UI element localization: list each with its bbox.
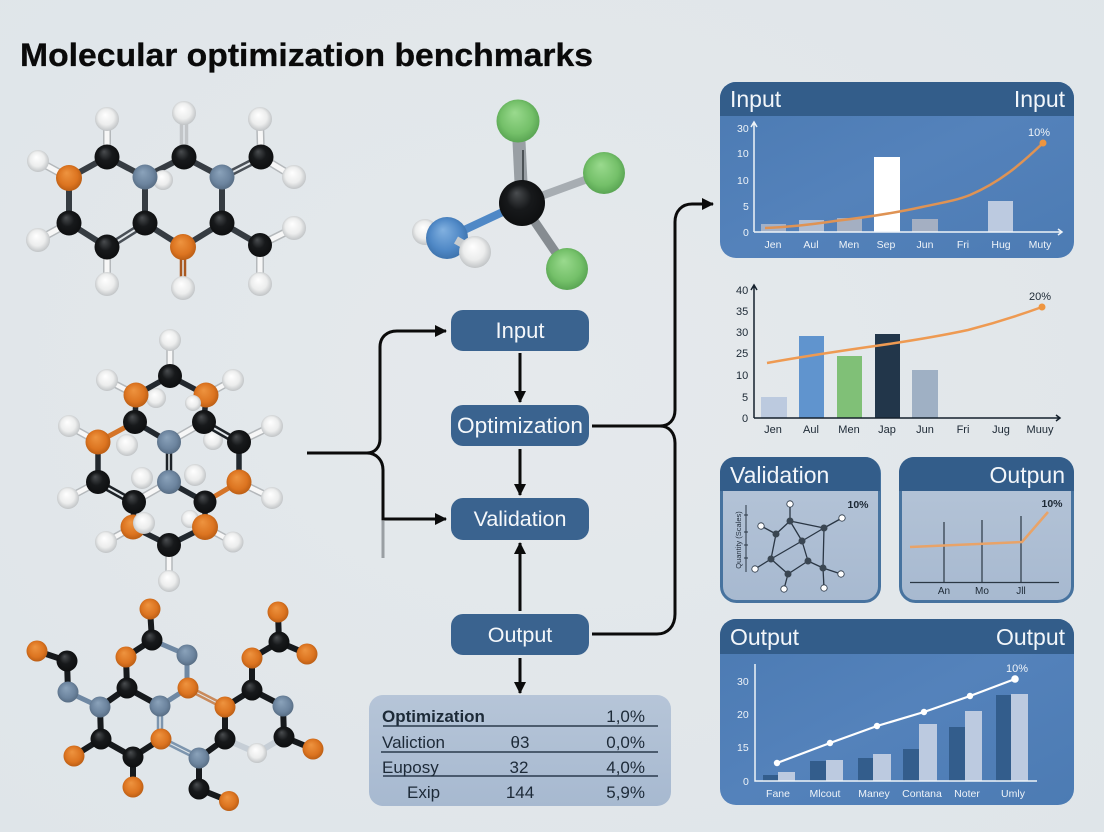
molecule: central green and blue model <box>412 100 625 290</box>
panel: output bar chart <box>720 619 1074 805</box>
panel heading: output: Output <box>996 624 1066 650</box>
labels: unboxed chart: Aul <box>803 424 819 436</box>
labels: output chart: 30 <box>737 676 749 688</box>
labels: input chart: 0 <box>743 227 749 239</box>
arrow: output to table <box>518 658 522 693</box>
labels: output chart: 0 <box>743 776 749 788</box>
flow box: validation: Validation <box>474 507 566 531</box>
bar chart: output pairs <box>763 694 1028 781</box>
title: Molecular optimization benchmarks <box>20 37 593 73</box>
table: benchmark results: 4,0% <box>606 758 645 777</box>
labels: unboxed chart: 25 <box>736 348 748 360</box>
table: benchmark results: Exip <box>407 783 440 802</box>
labels: unboxed chart: 10 <box>736 370 748 382</box>
labels: input chart: 10 <box>737 175 749 187</box>
labels: output chart: Noter <box>954 788 980 800</box>
table: benchmark results: 5,9% <box>606 783 645 802</box>
line chart: output: Mo <box>975 586 989 597</box>
labels: output chart: Umly <box>1001 788 1026 800</box>
arrow: output to validation <box>518 543 522 611</box>
labels: unboxed chart: Jun <box>916 424 934 436</box>
labels: unboxed chart: Fri <box>957 424 969 436</box>
trend line: input chart <box>765 140 1046 228</box>
labels: unboxed chart: Jap <box>878 424 896 436</box>
flow box: optimization: Optimization <box>457 413 583 438</box>
labels: unboxed chart: 0 <box>742 413 748 425</box>
panel heading: output <box>730 624 1066 650</box>
labels: input chart: Fri <box>957 239 969 251</box>
panel: input chart <box>720 82 1074 258</box>
labels: input chart: Aul <box>803 239 819 251</box>
network diagram: 10% <box>847 499 869 511</box>
table: benchmark results <box>369 695 671 806</box>
labels: unboxed chart: 30 <box>736 327 748 339</box>
table: benchmark results: Optimization <box>382 707 485 726</box>
labels: unboxed chart: Men <box>838 424 860 436</box>
line chart: output: 10% <box>1041 498 1063 510</box>
flow box: validation <box>451 498 589 540</box>
panel heading: output: Output <box>730 624 800 650</box>
labels: output chart: Maney <box>858 788 891 800</box>
panel heading: input: Input <box>730 86 782 112</box>
labels: unboxed chart: 5 <box>742 392 748 404</box>
panel heading: validation: Validation <box>730 462 829 488</box>
network diagram: Quantity (Scales) <box>734 511 743 569</box>
labels: unboxed chart: 40 <box>736 285 748 297</box>
table: benchmark results: 0,0% <box>606 733 645 752</box>
labels: input chart: 30 <box>737 123 749 135</box>
labels: output chart: Fane <box>766 788 790 800</box>
table: benchmark results: Valiction <box>382 733 445 752</box>
trend line: output chart <box>774 675 1019 766</box>
flow box: optimization <box>451 405 589 446</box>
labels: unboxed chart: Muuy <box>1027 424 1054 436</box>
labels: input chart: 10 <box>737 148 749 160</box>
panel: output line chart <box>899 457 1074 602</box>
labels: output chart: 10% <box>1006 663 1028 675</box>
trend line: unboxed chart <box>767 304 1046 363</box>
labels: output chart: 15 <box>737 742 749 754</box>
axes: output chart <box>755 664 1037 781</box>
molecule: middle left ball-and-stick <box>57 329 283 592</box>
labels: input chart: 5 <box>743 201 749 213</box>
labels: unboxed chart <box>736 285 1054 436</box>
molecule: top left ball-and-stick <box>26 101 306 300</box>
arrow: optimization and output to charts <box>592 204 713 634</box>
labels: input chart: Hug <box>991 239 1011 251</box>
flow box: output <box>451 614 589 655</box>
labels: output chart: 20 <box>737 709 749 721</box>
network diagram <box>734 499 869 592</box>
labels: input chart <box>737 123 1052 251</box>
labels: unboxed chart: Jen <box>764 424 782 436</box>
table: benchmark results: 144 <box>506 783 534 802</box>
flow box: input: Input <box>496 318 544 343</box>
labels: output chart <box>737 663 1028 800</box>
panel heading: input: Input <box>1014 86 1066 112</box>
panel: validation network <box>720 457 880 602</box>
labels: input chart: Muty <box>1029 239 1052 251</box>
bar chart: coloured bars <box>761 334 938 418</box>
line chart: output: An <box>938 586 950 597</box>
flow box: input <box>451 310 589 351</box>
panel heading: input <box>730 86 1066 112</box>
line chart: output: Jll <box>1016 586 1026 597</box>
labels: input chart: Sep <box>877 239 895 251</box>
flow box: output: Output <box>488 623 552 647</box>
chart: unboxed bar and line <box>736 285 1060 436</box>
labels: input chart: Jen <box>765 239 782 251</box>
arrow: source split to input and validation <box>307 331 446 558</box>
bar chart: input bars <box>761 157 1013 232</box>
labels: output chart: Contana <box>902 788 942 800</box>
labels: unboxed chart: 20% <box>1029 291 1051 303</box>
labels: input chart: Men <box>839 239 859 251</box>
labels: unboxed chart: 35 <box>736 306 748 318</box>
table: benchmark results: 32 <box>510 758 528 777</box>
line chart: output <box>910 498 1063 597</box>
labels: output chart: Mlcout <box>810 788 841 800</box>
table: benchmark results: θ3 <box>511 733 529 752</box>
labels: input chart: 10% <box>1028 127 1050 139</box>
labels: input chart: Jun <box>917 239 934 251</box>
axes: unboxed chart <box>751 285 1060 421</box>
labels: unboxed chart: Jug <box>992 424 1010 436</box>
molecule: bottom left ball-and-stick <box>26 598 324 811</box>
panel heading: outpun: Outpun <box>990 462 1065 488</box>
arrow: optimization to validation <box>518 449 522 495</box>
table: benchmark results: Euposy <box>382 758 439 777</box>
axes: input chart <box>751 122 1062 235</box>
arrow: input to optimization <box>518 353 522 402</box>
table: benchmark results: 1,0% <box>606 707 645 726</box>
